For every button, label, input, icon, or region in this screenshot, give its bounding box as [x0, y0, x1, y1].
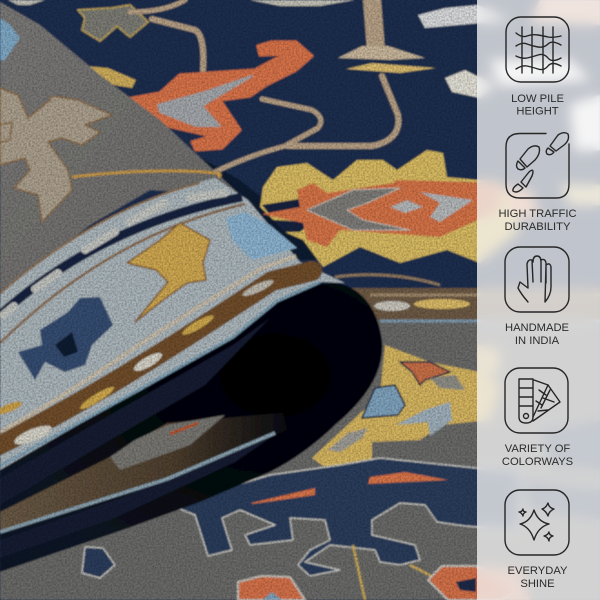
border: yellow motif	[127, 223, 210, 322]
medallion: orange	[262, 180, 500, 247]
border: band beads	[0, 277, 275, 448]
motif: gray inner scroll	[158, 76, 252, 126]
rolled rug: gray back	[0, 2, 240, 295]
navy rug field	[0, 0, 600, 300]
rolled rug: blue hem	[0, 282, 320, 466]
feature: high traffic durability	[498, 133, 577, 220]
navy band above border	[335, 275, 440, 285]
border: navy chain	[0, 197, 242, 315]
navy highlights	[0, 318, 270, 558]
underside stripes	[0, 413, 287, 533]
icon: hand	[505, 247, 569, 312]
label: everyday: EVERYDAY	[508, 565, 568, 577]
flower bit	[456, 578, 476, 592]
motif: vines	[130, 0, 398, 172]
back motif: gold line	[72, 171, 220, 177]
border: blue motif	[226, 212, 297, 260]
motif: stem arrow	[338, 46, 425, 60]
navy shading	[100, 100, 340, 260]
medallion: gray centre	[307, 188, 410, 230]
orange dashes	[251, 472, 448, 504]
gray rug field	[0, 318, 600, 600]
feature: variety of colorways	[505, 368, 570, 455]
icon: woven pile	[506, 17, 569, 82]
rug border strip	[340, 288, 600, 321]
cream scrap at top	[8, 0, 355, 6]
feature: low pile height	[506, 17, 569, 105]
second label line: HEIGHT	[516, 106, 559, 118]
icon: sparkles	[505, 490, 569, 555]
motif: yellow bar	[346, 63, 436, 73]
border: cream beads	[3, 193, 225, 315]
border: navy flower	[18, 297, 113, 380]
medallion lower: details	[328, 362, 465, 452]
stripes: blue hem	[0, 433, 275, 532]
flower centre	[262, 592, 282, 600]
yellow thread	[353, 545, 435, 600]
back motif: tan flower	[0, 88, 112, 222]
label: colorways: COLORWAYS	[502, 456, 573, 468]
medallion: pale leaf	[390, 192, 473, 222]
motif: yellow petal	[86, 66, 136, 88]
label: durability: DURABILITY	[505, 221, 571, 233]
border: cream line	[0, 256, 296, 432]
back motif: blue corner	[0, 18, 20, 60]
motif: white bits	[418, 0, 600, 600]
rolled rug: dark underside	[0, 283, 382, 572]
motif: top leaf	[78, 5, 148, 41]
label: shine: SHINE	[520, 578, 555, 590]
panel: feature sidebar	[477, 0, 600, 600]
stripes: orange dash	[170, 423, 198, 434]
border: brown band	[0, 271, 312, 447]
feature: handmade in india	[505, 247, 569, 334]
label: low pile height: LOW PILE	[511, 93, 564, 105]
orange flower right	[428, 566, 520, 600]
label: handmade: HANDMADE	[505, 322, 569, 334]
icon: colour fan	[505, 368, 568, 433]
border: brown outer line	[0, 183, 200, 293]
medallion lower: yellow	[312, 345, 500, 471]
orange flower left	[238, 576, 305, 600]
motif: orange scroll	[122, 42, 312, 150]
stripes: gray patch	[110, 415, 225, 470]
label: variety of: VARIETY OF	[505, 443, 570, 455]
icon: footprints	[506, 133, 569, 198]
label: high traffic: HIGH TRAFFIC	[498, 208, 577, 220]
navy dragon motif	[170, 458, 520, 576]
navy flower centre	[55, 332, 78, 357]
feature: everyday shine	[505, 490, 569, 577]
medallion: yellow	[260, 150, 520, 267]
border: inner brown line	[0, 204, 245, 343]
label: in india: IN INDIA	[515, 335, 560, 347]
small navy blob	[82, 547, 115, 578]
medallion: navy bits	[262, 198, 312, 232]
rolled rug: light border band	[0, 178, 345, 470]
